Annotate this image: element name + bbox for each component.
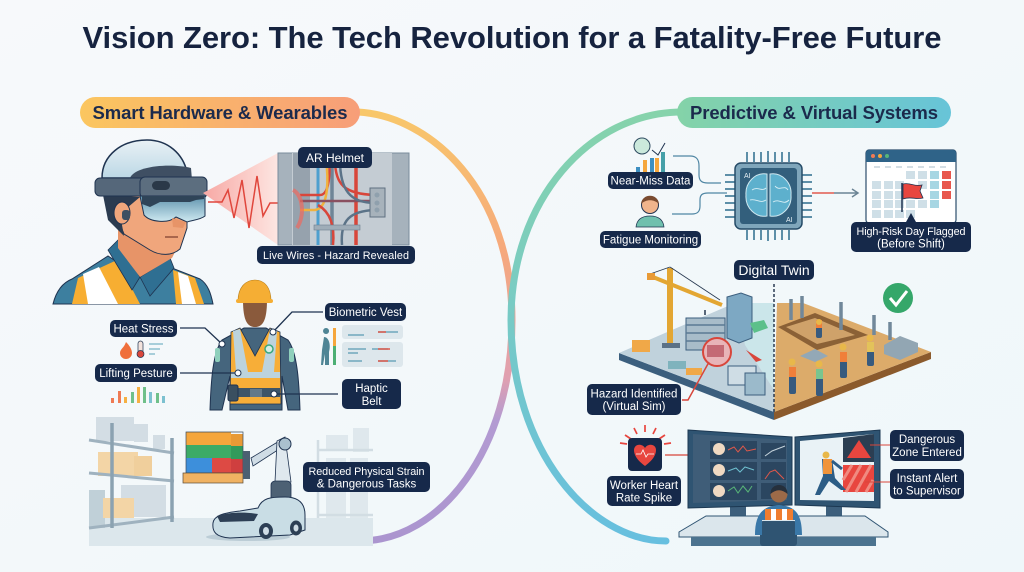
heading: predictive systems: Predictive & Virtual Systems xyxy=(690,102,938,123)
icon: near miss chart xyxy=(634,138,665,172)
label: lifting posture xyxy=(95,364,177,382)
panel: smart hardware and wearables xyxy=(53,97,430,546)
icon: biometric dashboard xyxy=(321,325,403,367)
icon: calendar with red flag xyxy=(866,150,956,223)
heading: predictive systems xyxy=(677,97,951,128)
label: heat stress: Heat Stress xyxy=(113,324,174,336)
icon: AI chip with brain: AI xyxy=(786,217,793,224)
label: near miss data xyxy=(608,172,693,189)
icon: fatigued worker xyxy=(636,196,664,227)
label: hazard identified: (Virtual Sim) xyxy=(602,401,666,413)
label: haptic belt xyxy=(342,379,401,409)
label: dangerous zone: Dangerous xyxy=(899,434,955,446)
illustration: wall with live wires xyxy=(278,153,409,245)
label: biometric vest: Biometric Vest xyxy=(329,307,403,319)
curve: right section arc xyxy=(511,112,682,541)
label: heat stress xyxy=(110,320,177,337)
connector: heart to monitor xyxy=(665,454,715,456)
label: reduced strain: Reduced Physical Strain xyxy=(308,466,424,478)
icon: red scan beam with signal xyxy=(203,153,284,245)
icon: flame thermometer lines xyxy=(120,341,163,359)
illustration: monitoring desk xyxy=(679,430,888,546)
connectors: labels to screen xyxy=(865,445,890,482)
label: hazard identified: Hazard Identified xyxy=(591,388,677,400)
illustration: worker with biometric vest xyxy=(210,280,300,410)
illustration: digital twin site xyxy=(619,267,931,420)
label: live wires hazard: Live Wires - Hazard Revealed xyxy=(263,250,409,262)
icon: AI chip with brain xyxy=(725,151,812,241)
label: worker heart rate: Rate Spike xyxy=(616,492,672,504)
label: dangerous zone xyxy=(890,430,964,461)
label: AR Helmet: AR Helmet xyxy=(306,151,365,165)
label: reduced strain: & Dangerous Tasks xyxy=(317,478,416,490)
label: live wires hazard xyxy=(257,246,415,264)
label: digital twin: Digital Twin xyxy=(738,262,810,278)
bar chart: lifting data xyxy=(111,387,165,403)
label: biometric vest xyxy=(325,303,406,321)
label: reduced strain xyxy=(303,462,430,492)
label: instant alert: to Supervisor xyxy=(893,486,961,498)
label: worker heart rate: Worker Heart xyxy=(610,480,679,492)
label: high risk day: High-Risk Day Flagged xyxy=(856,226,966,238)
icon: AI chip with brain: AI xyxy=(744,173,751,180)
label: fatigue monitoring xyxy=(600,231,701,248)
label: AR Helmet xyxy=(298,147,372,168)
label: worker heart rate xyxy=(607,476,681,506)
arrow: chip to calendar xyxy=(812,189,858,197)
label: instant alert xyxy=(890,469,964,499)
illustration: worker with AR helmet xyxy=(53,140,213,304)
heading: smart hardware: Smart Hardware & Wearables xyxy=(92,102,348,123)
label: haptic belt: Haptic xyxy=(355,383,388,395)
label: instant alert: Instant Alert xyxy=(897,473,958,485)
label: fatigue monitoring: Fatigue Monitoring xyxy=(603,234,698,246)
label: hazard identified xyxy=(587,384,681,415)
label: lifting posture: Lifting Pesture xyxy=(99,368,173,380)
label: dangerous zone: Zone Entered xyxy=(892,447,962,459)
connector lines to worker xyxy=(180,312,338,397)
heading: smart hardware xyxy=(80,97,360,128)
label: haptic belt: Belt xyxy=(362,396,382,408)
title: Vision Zero: The Tech Revolution for a Fatality-Free Future xyxy=(82,20,942,55)
panel: predictive and virtual systems xyxy=(587,97,971,546)
label: high risk day xyxy=(851,213,971,252)
connector lines into chip xyxy=(672,156,727,214)
illustration: warehouse robot xyxy=(89,417,373,546)
icon: heart rate alert xyxy=(620,425,671,471)
label: near miss data: Near-Miss Data xyxy=(611,176,691,188)
curve: left section arc xyxy=(358,112,512,541)
label: high risk day: (Before Shift) xyxy=(877,238,945,250)
